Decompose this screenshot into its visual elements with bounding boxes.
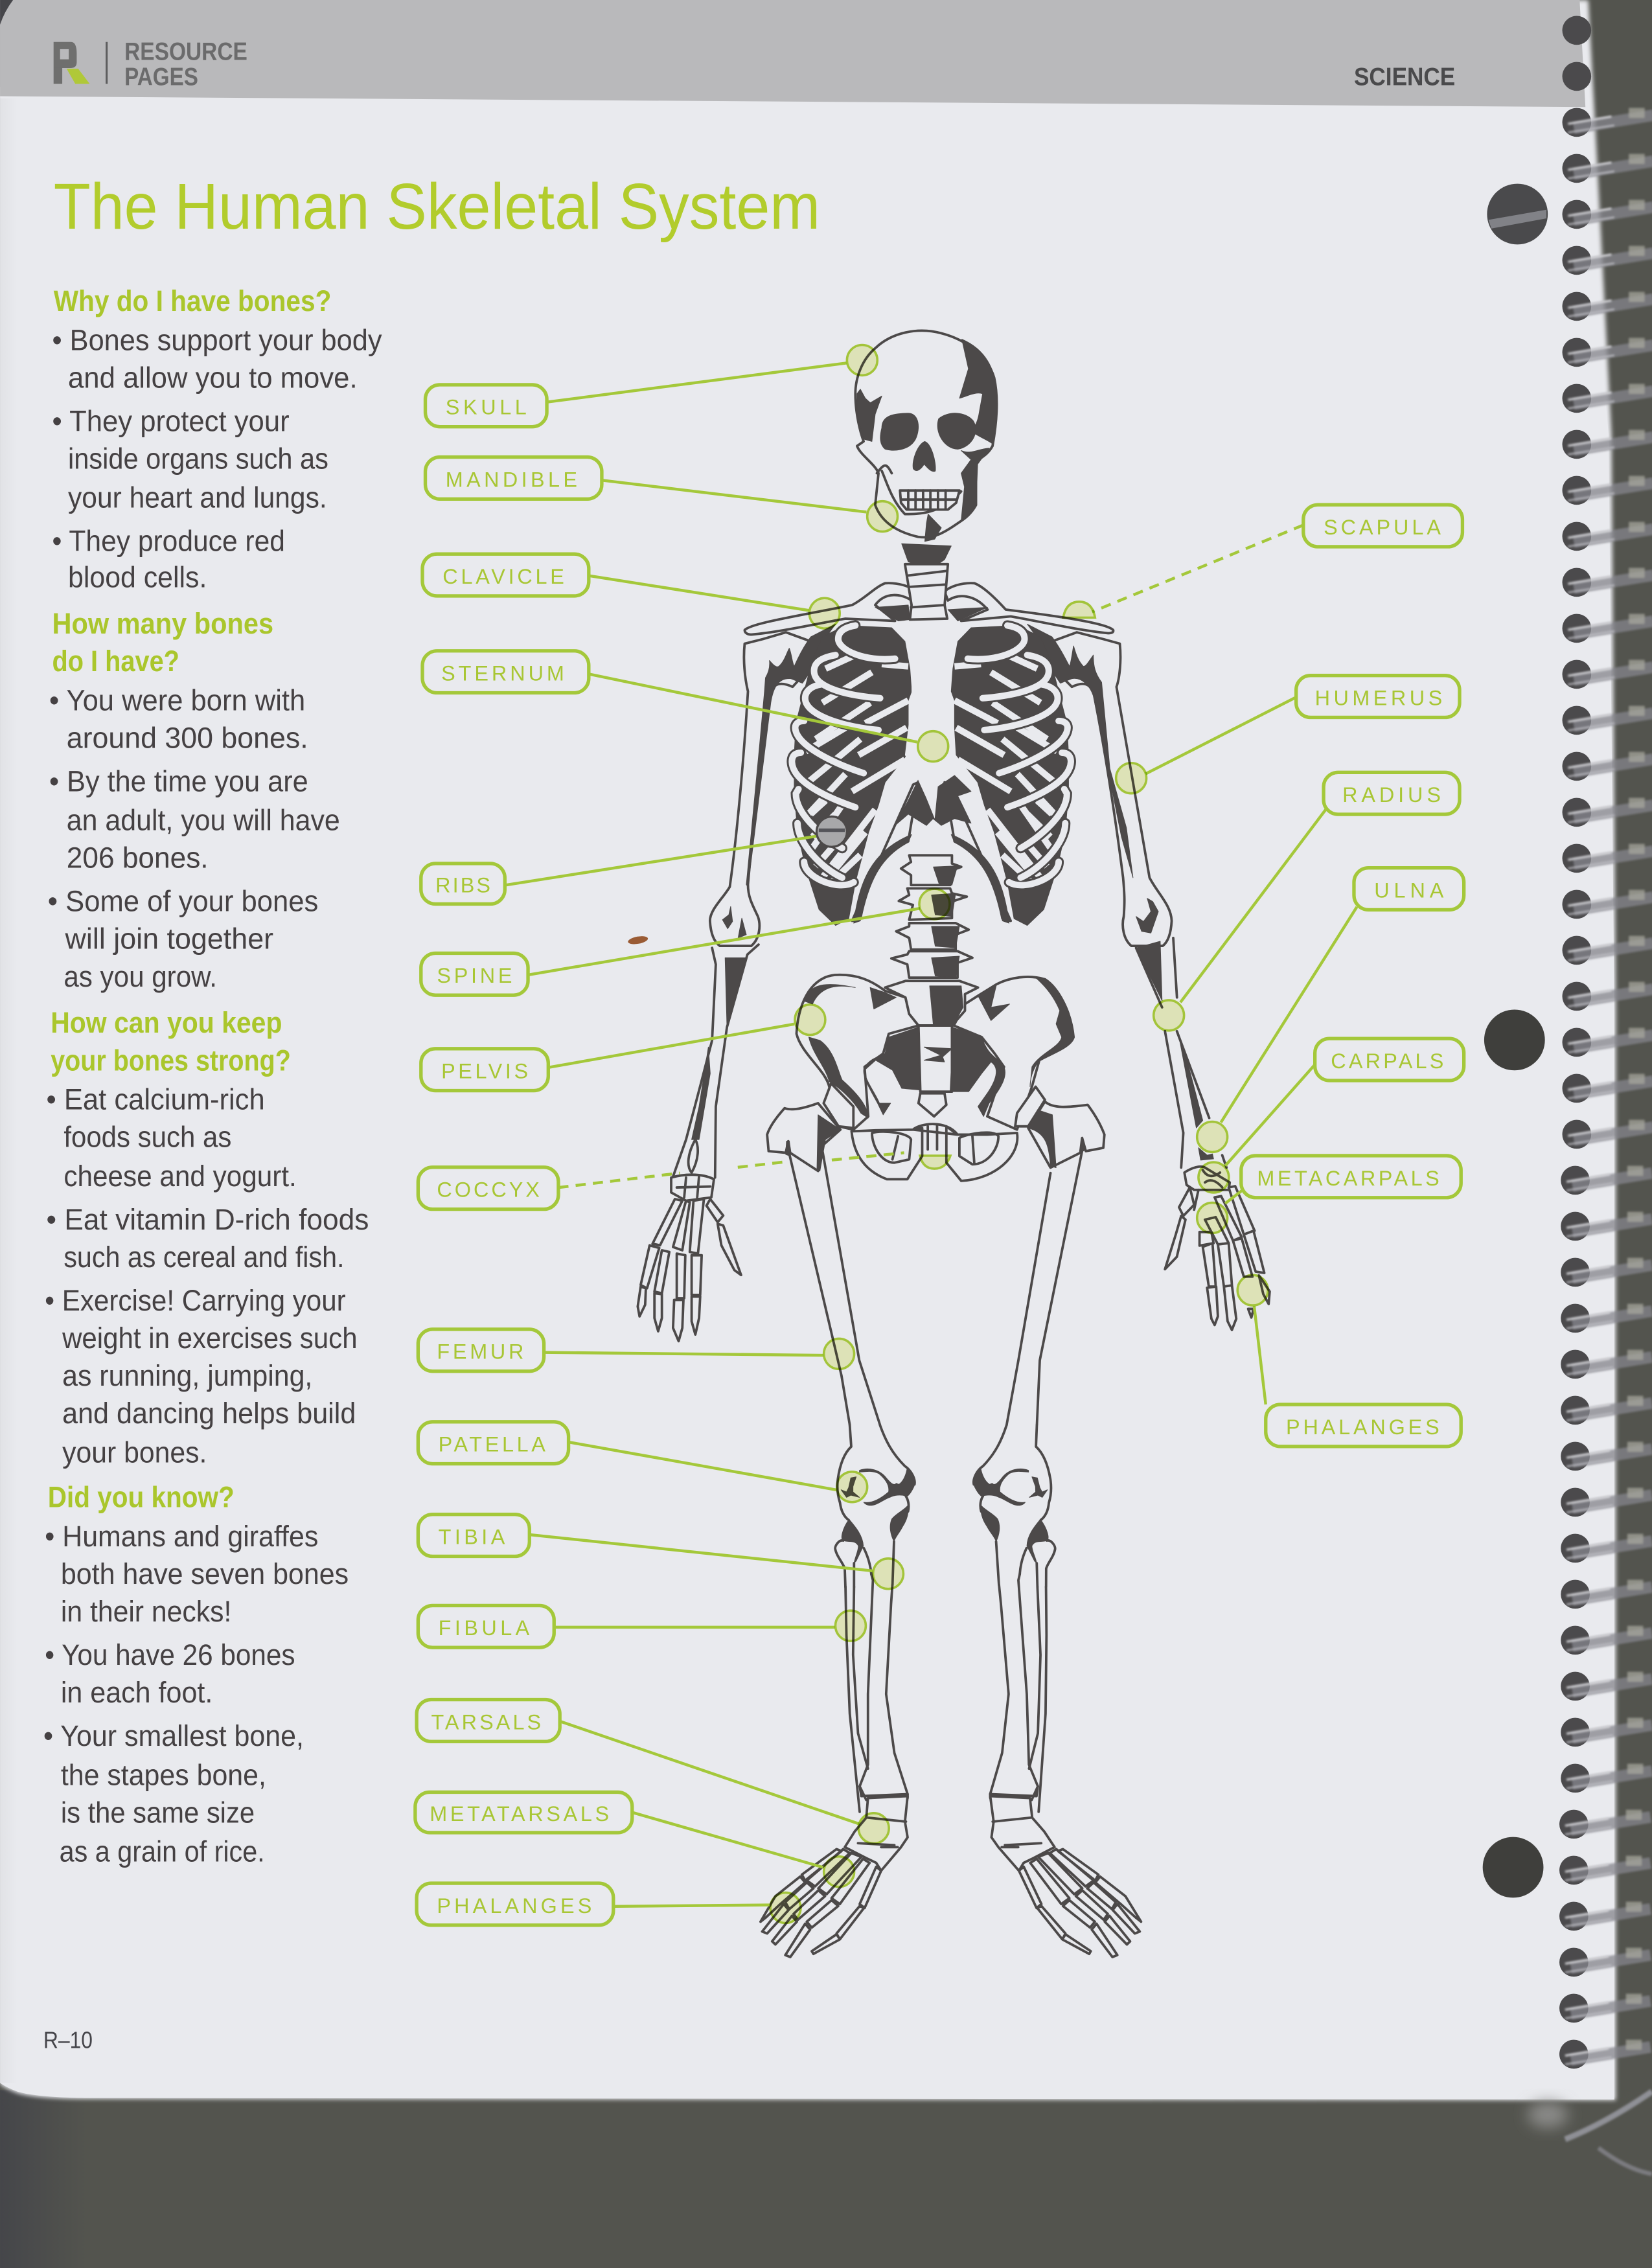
label: sternum: STERNUM	[441, 662, 564, 685]
label: metatarsals: METATARSALS	[430, 1802, 609, 1826]
bullet text block: weight in exercises such	[62, 1322, 358, 1355]
heading: how many bones	[52, 607, 273, 678]
smudge mark	[627, 935, 648, 946]
fingers	[1200, 1231, 1270, 1330]
label: radius: RADIUS	[1342, 783, 1441, 807]
header text: resource pages: PAGES	[124, 63, 198, 91]
bullet text block: • By the time you are	[49, 764, 308, 797]
heading: how many bones: How many bones	[52, 607, 273, 640]
label: ribs	[421, 864, 505, 904]
label: phalanges left: PHALANGES	[437, 1894, 591, 1918]
rib cage left half	[792, 626, 918, 926]
right femur head	[1028, 1101, 1105, 1167]
heading: how many bones: do I have?	[52, 645, 179, 678]
left femur head	[767, 1103, 840, 1171]
carpals	[1184, 1167, 1230, 1190]
heading: keep bones strong: How can you keep	[51, 1006, 282, 1039]
hip sockets	[823, 1083, 1045, 1128]
label: scapula: SCAPULA	[1324, 516, 1441, 539]
label: fibula	[418, 1605, 554, 1647]
pelvis shading left	[803, 984, 921, 1118]
skull shading	[857, 339, 997, 521]
bullet text block: as running, jumping,	[62, 1359, 312, 1392]
ankle and tarsals	[860, 1786, 908, 1800]
bullet text block: in each foot.	[61, 1676, 212, 1709]
label: tibia	[418, 1515, 529, 1556]
label: pelvis	[421, 1049, 548, 1091]
label: carpals	[1315, 1038, 1464, 1081]
bullet text block: and dancing helps build	[62, 1397, 356, 1430]
label: scapula	[1303, 505, 1462, 547]
heading: keep bones strong	[51, 1006, 291, 1077]
header text: science: SCIENCE	[1354, 63, 1455, 91]
coccyx	[919, 1094, 946, 1116]
chin shadow	[924, 514, 941, 542]
label: spine	[421, 953, 528, 995]
header text: resource pages: RESOURCE	[124, 38, 247, 66]
metatarsals and toes	[761, 1849, 881, 1957]
rib cage right half	[945, 626, 1071, 926]
bullet text block: around 300 bones.	[67, 721, 308, 754]
bullet text block: foods such as	[63, 1121, 231, 1154]
pubic bones	[851, 1124, 1017, 1181]
right forearm and hand	[1165, 1031, 1270, 1330]
label: ribs: RIBS	[435, 874, 490, 897]
bullet text block: inside organs such as	[68, 442, 328, 475]
nose	[913, 441, 935, 472]
bullet text block: and allow you to move.	[68, 361, 358, 394]
bullet text block: your bones.	[62, 1436, 207, 1469]
top-left corner shadow	[0, 0, 13, 25]
label: clavicle: CLAVICLE	[442, 565, 564, 588]
label: fibula: FIBULA	[439, 1616, 530, 1640]
large binder hole: bottom	[1483, 1837, 1543, 1897]
left edge shade	[0, 98, 17, 2083]
header text: resource pages	[124, 38, 247, 91]
label: tarsals	[417, 1700, 560, 1741]
bullet text block: an adult, you will have	[67, 804, 340, 837]
knee joint	[835, 1425, 915, 1587]
label: coccyx: COCCYX	[437, 1178, 540, 1202]
femur shafts	[788, 1146, 1082, 1425]
bullet text block: as you grow.	[63, 960, 217, 993]
bullet text block: such as cereal and fish.	[63, 1241, 344, 1274]
label: clavicle	[422, 554, 589, 596]
label: phalanges right	[1266, 1404, 1461, 1447]
bullet text block: both have seven bones	[61, 1557, 349, 1590]
bullet text block: • Humans and giraffes	[45, 1520, 318, 1553]
label: mandible	[426, 457, 602, 499]
right forearm upper	[1136, 938, 1177, 1007]
label: phalanges left	[417, 1883, 614, 1925]
label: femur: FEMUR	[437, 1340, 523, 1364]
bullet text block: in their necks!	[61, 1595, 231, 1628]
label: mandible: MANDIBLE	[446, 468, 577, 491]
bullet text block	[43, 1520, 349, 1868]
lower arm, spine and pelvis	[637, 855, 1177, 1341]
left leg and foot	[761, 1425, 915, 1957]
section: how can you keep your bones strong	[45, 1006, 369, 1469]
right leg and foot	[972, 1425, 1142, 1957]
label: radius	[1324, 772, 1460, 814]
head, neck, sternum	[744, 330, 1113, 825]
bullet text block: your heart and lungs.	[68, 481, 327, 514]
page number: R–10	[43, 2028, 93, 2054]
metacarpals	[1205, 1186, 1255, 1244]
bullet text block: • Exercise! Carrying your	[45, 1284, 346, 1317]
skeleton illustration	[637, 330, 1270, 1957]
label: patella	[418, 1422, 569, 1464]
bottom dark band	[0, 2090, 87, 2268]
bullet text block: • You were born with	[49, 683, 305, 716]
section: why do I have bones	[52, 284, 382, 594]
forearm bones	[1165, 1031, 1226, 1167]
bullet text block: • Eat calcium-rich	[47, 1083, 265, 1116]
section: did you know	[43, 1481, 349, 1868]
bullet text block	[52, 323, 382, 594]
arms upper: humeri	[710, 624, 1172, 946]
tibia shaft	[860, 1574, 908, 1794]
label: phalanges right: PHALANGES	[1286, 1415, 1440, 1439]
label: skull	[426, 385, 547, 427]
heading: did you know: Did you know?	[48, 1481, 235, 1514]
bullet text block: 206 bones.	[67, 842, 209, 875]
label: tarsals: TARSALS	[431, 1710, 541, 1734]
heading: keep bones strong: your bones strong?	[51, 1044, 291, 1077]
title: The Human Skeletal System	[54, 170, 820, 243]
fibula shaft	[845, 1587, 868, 1812]
left hand	[671, 1174, 714, 1200]
left forearm	[673, 945, 759, 1178]
label: ulna	[1354, 868, 1464, 910]
bullet text block: • Your smallest bone,	[43, 1719, 304, 1752]
pelvis shading right	[950, 978, 1073, 1116]
bullet text block: as a grain of rice.	[60, 1835, 265, 1868]
bullet text block: • They produce red	[52, 525, 285, 558]
thumb	[1165, 1187, 1194, 1269]
clavicles and shoulder blade spine	[744, 583, 915, 635]
bullet text block	[45, 1083, 369, 1469]
label: metatarsals	[415, 1792, 632, 1833]
label: skull: SKULL	[446, 396, 527, 419]
bullet text block: blood cells.	[68, 561, 207, 594]
teeth	[900, 490, 959, 510]
label: coccyx	[418, 1167, 558, 1209]
large binder hole: top	[1487, 184, 1548, 244]
label: spine: SPINE	[437, 964, 512, 987]
bullet text block: cheese and yogurt.	[63, 1160, 297, 1193]
label: metacarpals	[1241, 1156, 1461, 1198]
sacrum and lumbar base	[885, 981, 978, 1025]
bullet text block: • Eat vitamin D-rich foods	[47, 1203, 369, 1236]
label: tibia: TIBIA	[439, 1525, 505, 1548]
large binder hole: middle	[1484, 1009, 1545, 1070]
lumbar spine	[891, 855, 972, 978]
cervical spine	[905, 564, 948, 619]
label: sternum	[422, 651, 589, 693]
bullet text block: • Some of your bones	[48, 885, 318, 918]
callout circles on bones	[770, 345, 1268, 1923]
label: humerus: HUMERUS	[1315, 686, 1442, 709]
heading: why do I have bones: Why do I have bones?	[54, 284, 331, 317]
label: femur	[418, 1329, 544, 1371]
label: pelvis: PELVIS	[441, 1060, 528, 1083]
jaw line	[877, 466, 961, 514]
bullet text block: is the same size	[61, 1796, 255, 1829]
bullet text block: • Bones support your body	[52, 323, 382, 356]
bottom loose coil wires	[1528, 2092, 1652, 2174]
sternum	[895, 775, 971, 825]
logo divider	[106, 42, 108, 84]
label: carpals: CARPALS	[1331, 1049, 1443, 1073]
connector lines	[505, 363, 1357, 1907]
bullet text block: will join together	[65, 922, 273, 956]
label: humerus	[1296, 676, 1460, 717]
bullet text block: the stapes bone,	[61, 1758, 266, 1791]
label: ulna: ULNA	[1374, 878, 1444, 902]
bullet text block: • They protect your	[52, 404, 290, 437]
logo: Resource Pages R mark	[54, 42, 90, 84]
eye sockets	[880, 413, 976, 450]
label: patella: PATELLA	[439, 1433, 545, 1456]
label: metacarpals: METACARPALS	[1257, 1167, 1440, 1190]
bullet text block: • You have 26 bones	[45, 1638, 295, 1671]
spiral binding holes and coils	[1559, 16, 1652, 2068]
skull outline	[855, 330, 997, 537]
pelvis left ilium	[796, 975, 919, 1130]
pelvis right ilium	[954, 977, 1073, 1130]
section: how many bones	[48, 607, 340, 993]
header band	[0, 0, 1585, 107]
bullet text block	[48, 683, 340, 993]
